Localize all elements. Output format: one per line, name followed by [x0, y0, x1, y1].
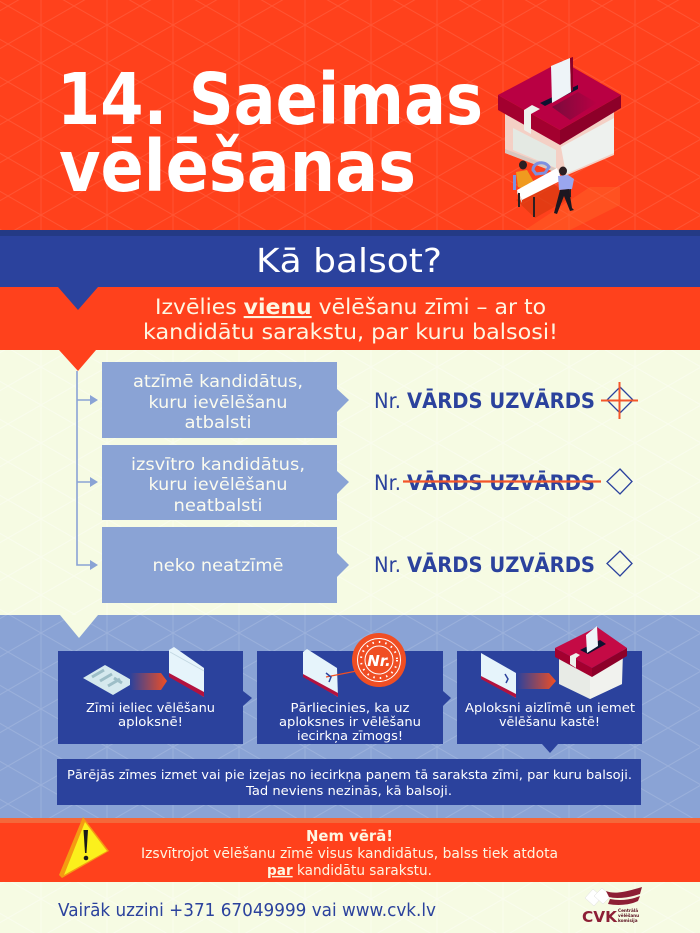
option box: no marks — [102, 527, 349, 603]
ballot row: unmarked: VĀRDS UZVĀRDS — [407, 552, 595, 577]
title: vēlēšanas — [59, 125, 416, 208]
option box: strike candidates: neatbalsti — [174, 496, 262, 515]
ballot row: marked: VĀRDS UZVĀRDS — [407, 388, 595, 413]
icon: stamp — [352, 633, 406, 687]
people at table — [513, 160, 574, 218]
CVK logo: CVK — [582, 908, 618, 926]
option box: mark candidates: kuru ievēlēšanu — [148, 393, 288, 412]
warning text: Ņem vērā! — [306, 827, 393, 845]
step 2: check stamp: iecirkņa zīmogs! — [297, 729, 403, 744]
panel: warning — [0, 817, 700, 882]
CVK logo — [582, 887, 642, 926]
CVK logo: komisija — [618, 918, 638, 923]
instruction text: kandidātu sarakstu, par kuru balsosi! — [143, 320, 558, 344]
note box: Pārējās zīmes izmet vai pie izejas no iecirkņa paņem tā saraksta zīmi, par kuru balsoji. — [67, 768, 632, 783]
option box: no marks: neko neatzīmē — [152, 556, 284, 575]
option box: mark candidates: atzīmē kandidātus, — [133, 372, 303, 391]
warning text: par kandidātu sarakstu. — [267, 863, 432, 879]
ballot row: struck out: VĀRDS UZVĀRDS — [407, 470, 595, 495]
panel: steps — [0, 615, 700, 818]
note box — [57, 759, 641, 805]
option box: strike candidates: izsvītro kandidātus, — [131, 455, 305, 474]
step 3: drop envelope into box: vēlēšanu kastē! — [499, 715, 600, 730]
ballot row: struck out: Nr. — [374, 471, 401, 495]
icon: ballot box with people — [498, 57, 621, 218]
contact line: Vairāk uzzini +371 67049999 vai www.cvk.lv — [58, 900, 436, 921]
step 3: drop envelope into box: Aploksni aizlīmē un iemet — [465, 701, 635, 716]
CVK logo: vēlēšanu — [618, 913, 639, 918]
warning text: Izsvītrojot vēlēšanu zīmē visus kandidātus, balss tiek atdota — [141, 846, 558, 862]
step 2: check stamp — [257, 633, 451, 744]
heading: Kā balsot: Kā balsot? — [256, 241, 442, 280]
panel: marking options — [0, 350, 700, 615]
instruction text — [143, 295, 558, 344]
instruction text: Izvēlies vienu vēlēšanu zīmi – ar to — [155, 295, 546, 319]
step 3: drop envelope into box — [457, 626, 642, 753]
option box: mark candidates — [102, 362, 349, 438]
CVK logo: Centrālā — [618, 908, 638, 913]
note box: Tad neviens nezinās, kā balsoji. — [245, 784, 452, 799]
step 2: check stamp: aploksnes ir vēlēšanu — [279, 715, 421, 730]
section: Kā balsot banner — [0, 230, 700, 287]
icon: stamp: Nr. — [367, 652, 391, 670]
step 1: put ballot in envelope — [58, 647, 252, 744]
section: choose one list banner — [0, 287, 700, 350]
ballot row: unmarked: Nr. — [374, 553, 401, 577]
step 1: put ballot in envelope: aploksnē! — [118, 715, 183, 730]
step 1: put ballot in envelope: Zīmi ieliec vēlēšanu — [86, 701, 215, 716]
footer — [0, 882, 700, 933]
option box: strike candidates — [102, 445, 349, 520]
icon: small ballot box — [555, 626, 627, 699]
title — [57, 58, 483, 208]
warning text — [141, 827, 558, 879]
step 2: check stamp: Pārliecinies, ka uz — [290, 701, 410, 716]
ballot row: marked — [374, 382, 638, 419]
icon: warning triangle — [59, 817, 109, 878]
option box: strike candidates: kuru ievēlēšanu — [148, 475, 288, 494]
option box: mark candidates: atbalsti — [184, 413, 252, 432]
title: 14. Saeimas — [57, 58, 483, 141]
ballot row: marked: Nr. — [374, 389, 401, 413]
connector tree — [77, 371, 98, 570]
header panel — [0, 0, 700, 230]
